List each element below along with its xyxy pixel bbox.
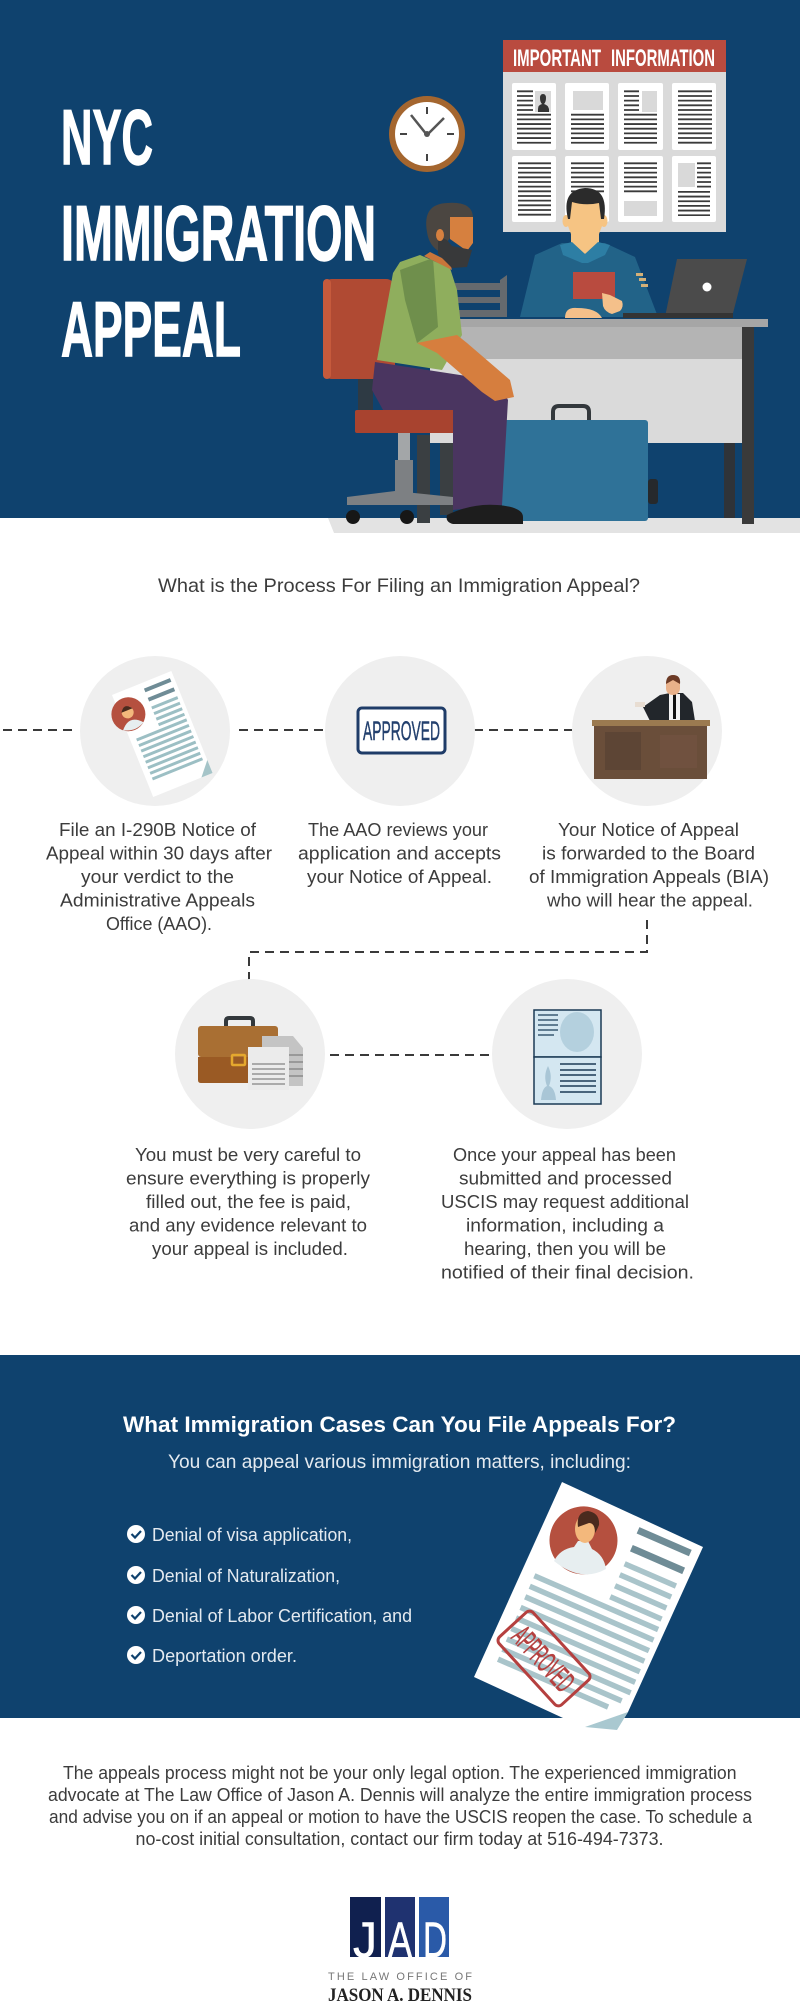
notice board: important information bbox=[503, 40, 726, 232]
text: step 3: who will hear the appeal. bbox=[546, 890, 753, 910]
title: NYC Immigration Appeal bbox=[61, 93, 376, 373]
icon: open passport bbox=[492, 979, 642, 1129]
text: step 2: your Notice of Appeal. bbox=[307, 866, 492, 887]
title: NYC Immigration Appeal: IMMIGRATION bbox=[61, 189, 376, 277]
icon: briefcase with papers bbox=[175, 979, 325, 1129]
step 1: file notice of appeal bbox=[46, 656, 272, 934]
icon: back chair behind desk bbox=[455, 275, 507, 317]
text: closing paragraph bbox=[48, 1763, 753, 1849]
text: step 4: ensure everything is properly bbox=[126, 1168, 371, 1188]
text: step 3: Your Notice of Appeal bbox=[558, 819, 739, 840]
icon: wall clock bbox=[389, 96, 465, 172]
step 4: be careful bbox=[126, 979, 371, 1259]
text: step 5: notified of their final decision. bbox=[441, 1262, 694, 1282]
step 2: AAO review bbox=[298, 656, 501, 887]
heading: cases: What Immigration Cases Can You File Appeals For? bbox=[123, 1412, 676, 1437]
text: step 3 bbox=[529, 819, 769, 910]
text: step 4: your appeal is included. bbox=[152, 1238, 348, 1259]
text: closing paragraph: no-cost initial consultation, contact our firm today at 516-494-7373. bbox=[136, 1829, 664, 1849]
clerk at desk bbox=[520, 188, 658, 318]
desk bbox=[417, 319, 768, 524]
text: closing paragraph: and advise you on if an appeal or motion to have the USCIS reopen the case. To schedule a bbox=[49, 1807, 753, 1827]
icon: approved stamp bbox=[325, 656, 475, 806]
text: step 1: File an I-290B Notice of bbox=[59, 819, 257, 840]
text: step 1: Administrative Appeals bbox=[60, 890, 255, 910]
subheading: cases: You can appeal various immigration matters, including: bbox=[168, 1451, 631, 1473]
text: step 2: The AAO reviews your bbox=[308, 819, 488, 840]
text: step 1 bbox=[46, 819, 272, 934]
icon: blue suitcase bbox=[502, 406, 658, 521]
panel: appeal cases band bbox=[0, 1355, 800, 1730]
text: step 5: submitted and processed bbox=[459, 1168, 672, 1188]
text: step 5: hearing, then you will be bbox=[464, 1238, 666, 1259]
text: step 2 bbox=[298, 819, 501, 887]
text: step 5 bbox=[441, 1144, 694, 1282]
text: step 3: is forwarded to the Board bbox=[542, 842, 755, 864]
text: step 2: application and accepts bbox=[298, 842, 501, 864]
seated man bbox=[372, 203, 523, 524]
text: closing paragraph: advocate at The Law Office of Jason A. Dennis will analyze the entire immigration process bbox=[48, 1785, 752, 1805]
icon: approved stamp: APPROVED bbox=[363, 716, 440, 746]
text: step 4 bbox=[126, 1144, 371, 1259]
title: NYC Immigration Appeal: NYC bbox=[61, 93, 153, 181]
text: step 1: Office (AAO). bbox=[106, 913, 212, 934]
logo: law office of Jason A. Dennis: A bbox=[388, 1912, 412, 1968]
title: NYC Immigration Appeal: APPEAL bbox=[61, 285, 241, 373]
logo: law office of Jason A. Dennis: THE LAW OFFICE OF bbox=[328, 1971, 472, 1983]
text: step 5: information, including a bbox=[466, 1214, 665, 1236]
logo: law office of Jason A. Dennis bbox=[328, 1897, 472, 2003]
notice board: important information: IMPORTANT bbox=[513, 45, 601, 72]
logo: law office of Jason A. Dennis: J bbox=[353, 1912, 377, 1968]
logo: law office of Jason A. Dennis: D bbox=[423, 1912, 447, 1968]
step 5: final decision bbox=[441, 979, 694, 1282]
checklist: appealable matters bbox=[127, 1524, 412, 1666]
text: step 4: You must be very careful to bbox=[135, 1144, 361, 1165]
text: step 1: your verdict to the bbox=[81, 866, 234, 887]
illustration: approved application document bbox=[474, 1482, 703, 1730]
checklist: appealable matters: Denial of Naturalization, bbox=[152, 1565, 340, 1586]
text: step 5: USCIS may request additional bbox=[441, 1191, 689, 1212]
checklist: appealable matters: Denial of Labor Certification, and bbox=[152, 1605, 412, 1626]
checklist: appealable matters: Denial of visa application, bbox=[152, 1524, 352, 1545]
text: step 3: of Immigration Appeals (BIA) bbox=[529, 866, 769, 887]
icon: laptop bbox=[623, 259, 747, 318]
step 3: forwarded to BIA bbox=[529, 656, 769, 910]
text: closing paragraph: The appeals process might not be your only legal option. The experienced immigration bbox=[63, 1763, 736, 1783]
icon: red office chair bbox=[323, 279, 455, 524]
icon: judge at bench bbox=[572, 656, 722, 806]
heading: process section: What is the Process For Filing an Immigration Appeal? bbox=[158, 575, 640, 597]
process connector: dashed path bbox=[3, 730, 647, 1055]
checklist: appealable matters: Deportation order. bbox=[152, 1645, 297, 1666]
panel: hero banner bbox=[0, 0, 800, 533]
text: step 4: filled out, the fee is paid, bbox=[146, 1191, 351, 1212]
illustration: approved application document: APPROVED bbox=[505, 1620, 581, 1699]
text: step 5: Once your appeal has been bbox=[453, 1144, 676, 1165]
text: step 1: Appeal within 30 days after bbox=[46, 842, 272, 864]
text: step 4: and any evidence relevant to bbox=[129, 1214, 367, 1236]
notice board: important information: INFORMATION bbox=[611, 45, 715, 72]
icon: application form bbox=[80, 656, 230, 806]
